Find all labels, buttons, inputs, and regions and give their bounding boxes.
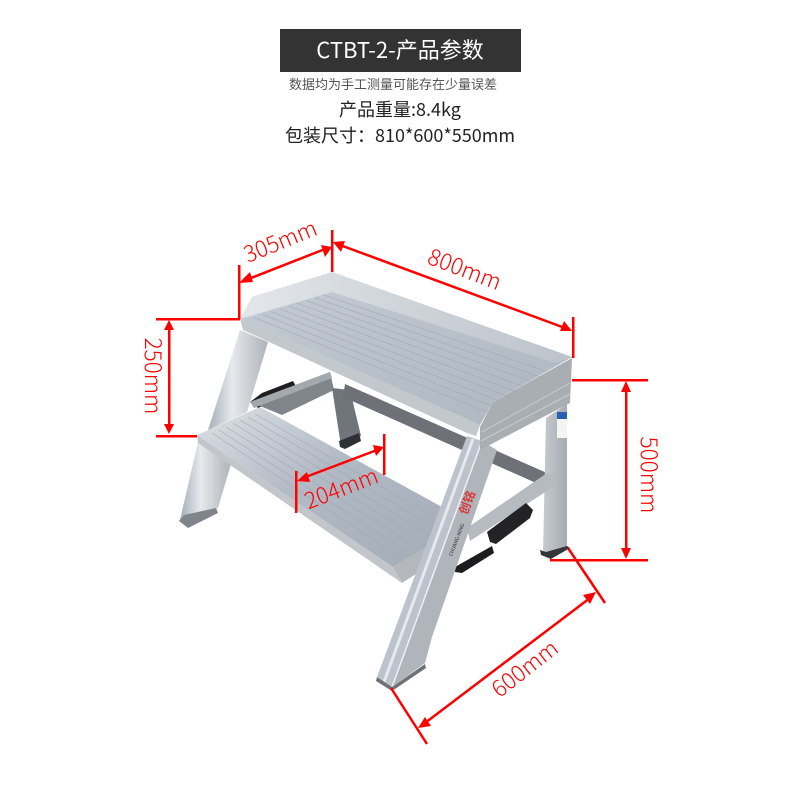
centre rear leg (332, 388, 361, 449)
left foot (179, 508, 218, 528)
dimension: 500mm (550, 379, 666, 562)
leg latin text: CHUANG-MING (447, 522, 467, 557)
long under-rail (343, 384, 547, 487)
side handle (487, 503, 533, 544)
step ladder photo (179, 272, 572, 691)
upper step tray (240, 272, 572, 436)
left upper leg (208, 330, 268, 430)
right long leg (376, 436, 497, 691)
package size: 包装尺寸：810*600*550mm (285, 122, 515, 148)
dimension: 204mm (295, 434, 386, 516)
dimension: 800mm (333, 240, 574, 358)
product weight: 产品重量:8.4kg (339, 96, 461, 122)
lower handle (455, 546, 494, 573)
dimension: 600mm (391, 548, 605, 744)
back crossbar and handle (250, 372, 334, 415)
upper step end panel (480, 358, 572, 450)
dimension: 250mm: 250mm (138, 338, 170, 414)
dimension: 204mm: 204mm (299, 459, 383, 516)
title bar: CTBT-2-产品参数 (316, 33, 484, 65)
dimension: 305mm (238, 211, 334, 319)
dimension: 800mm: 800mm (423, 240, 507, 297)
dimension: 250mm (138, 318, 240, 438)
left lower leg (180, 442, 231, 520)
lower step (197, 407, 442, 583)
leg brand text: 创铭 (455, 488, 479, 517)
dimension: 305mm: 305mm (238, 211, 322, 270)
measurement disclaimer: 数据均为手工测量可能存在少量误差 (289, 74, 497, 93)
right rear leg (540, 404, 570, 559)
title bar (280, 29, 521, 72)
side crossbar (467, 473, 555, 541)
dimension: 600mm: 600mm (484, 631, 564, 704)
dimension: 500mm: 500mm (634, 437, 666, 513)
